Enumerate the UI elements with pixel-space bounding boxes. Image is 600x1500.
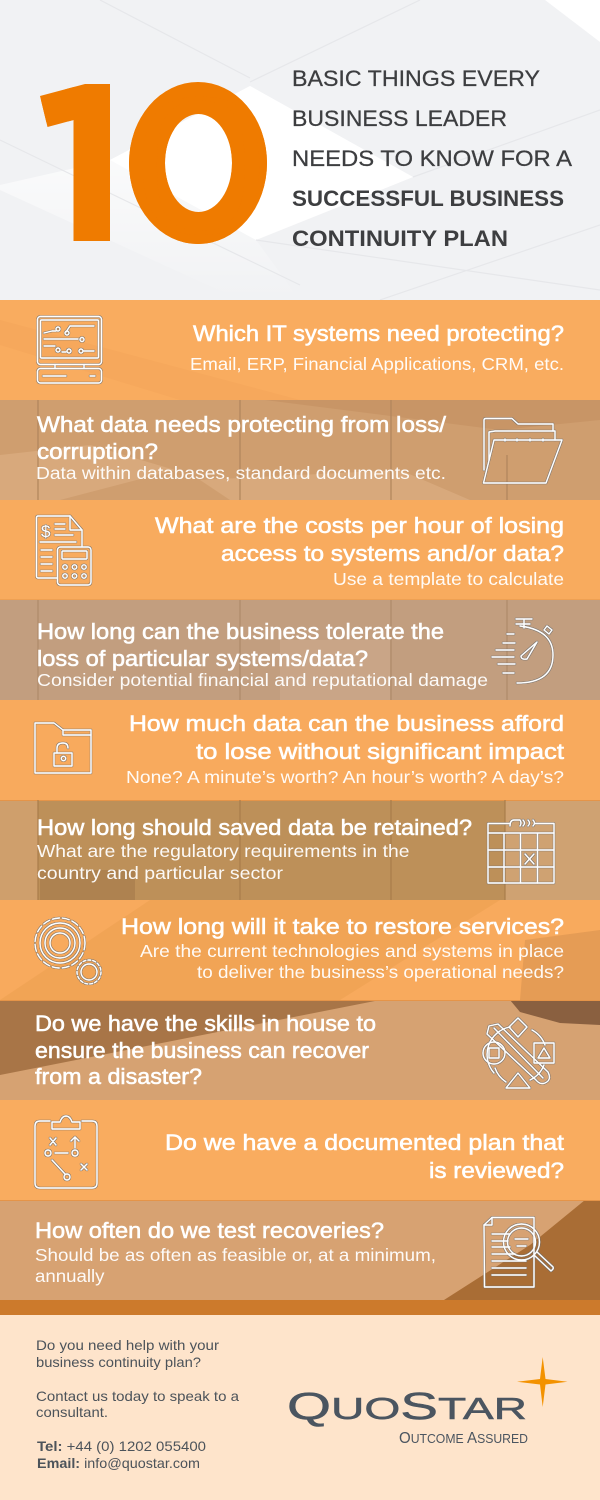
divider band: [0, 1300, 600, 1315]
text: [37, 841, 410, 883]
text: to deliver the business’s operational needs?: [197, 962, 564, 982]
panel: question 7: [0, 900, 600, 1000]
icon: folders: [484, 418, 562, 483]
heading: [37, 619, 444, 671]
text: annually: [35, 1266, 105, 1286]
heading: Do we have a documented plan that: [165, 1130, 564, 1155]
heading: How long can the business tolerate the: [37, 619, 444, 644]
heading: [37, 412, 447, 464]
panel: question 8: [0, 1000, 600, 1100]
heading: [155, 513, 564, 566]
heading: How long should saved data be retained?: [37, 815, 472, 840]
contact text: Email: info@quostar.com: [37, 1455, 200, 1471]
panel: question 9: [0, 1100, 600, 1200]
heading: What are the costs per hour of losing: [155, 513, 564, 538]
text: Consider potential financial and reputational damage: [37, 670, 488, 690]
text: country and particular sector: [37, 863, 283, 883]
heading: Do we have the skills in house to: [35, 1011, 376, 1036]
panel: question 10: [0, 1200, 600, 1300]
contact text: consultant.: [36, 1404, 108, 1420]
title: CONTINUITY PLAN: [292, 226, 508, 251]
heading: to lose without significant impact: [196, 739, 564, 764]
heading: access to systems and/or data?: [221, 541, 564, 566]
heading: corruption?: [37, 439, 158, 464]
panel: question 5: [0, 700, 600, 800]
text: Should be as often as feasible or, at a minimum,: [35, 1245, 436, 1265]
contact text: business continuity plan?: [36, 1354, 201, 1370]
panel: footer: [0, 1315, 600, 1500]
heading: How much data can the business afford: [129, 711, 564, 736]
logo wordmark: Q UO S TAR: [287, 1386, 527, 1428]
text: Email, ERP, Financial Applications, CRM, etc.: [190, 354, 564, 374]
title: BUSINESS LEADER: [292, 106, 507, 131]
text: Data within databases, standard documents etc.: [36, 463, 446, 483]
panel: question 2: [0, 400, 600, 500]
icon: invoice and calculator: $: [41, 522, 51, 541]
heading: What data needs protecting from loss/: [37, 412, 447, 437]
icon: document with magnifier: [484, 1218, 553, 1287]
icon: calendar: [488, 820, 554, 883]
heading: loss of particular systems/data?: [37, 646, 368, 671]
contact text: Do you need help with your: [36, 1337, 219, 1353]
heading: Which IT systems need protecting?: [193, 321, 564, 346]
panel: question 3: [0, 500, 600, 600]
contact text: Contact us today to speak to a: [36, 1388, 239, 1404]
text: [35, 1245, 436, 1286]
big number 10: 0: [117, 41, 285, 291]
heading: is reviewed?: [429, 1158, 564, 1183]
logo star: [517, 1357, 568, 1407]
icon: clipboard plan: [35, 1116, 97, 1188]
contact text: Tel: +44 (0) 1202 055400: [37, 1438, 206, 1454]
contact text: [36, 1337, 239, 1471]
heading: How long will it take to restore services?: [121, 914, 564, 939]
title: BASIC THINGS EVERY: [292, 66, 540, 91]
logo tagline: OUTCOME ASSURED: [399, 1430, 528, 1447]
heading: How often do we test recoveries?: [35, 1218, 384, 1243]
panel: question 6: [0, 800, 600, 900]
header background: [0, 0, 600, 300]
icon: folder with padlock: [35, 723, 91, 773]
heading: [129, 711, 564, 764]
icon: design tools: [483, 1018, 554, 1088]
text: Use a template to calculate: [333, 569, 564, 589]
heading: ensure the business can recover: [35, 1038, 369, 1063]
text: None? A minute’s worth? An hour’s worth? A day’s?: [126, 767, 564, 787]
text: What are the regulatory requirements in the: [37, 841, 410, 861]
panel: question 1: [0, 300, 600, 400]
heading: [165, 1130, 564, 1183]
title: NEEDS TO KNOW FOR A: [292, 146, 572, 171]
icon: stopwatch: [492, 619, 553, 683]
big number 10: [40, 82, 267, 244]
title: SUCCESSFUL BUSINESS: [292, 186, 564, 211]
icon: computer circuit: [38, 316, 102, 383]
panel: question 4: [0, 600, 600, 700]
icon: invoice and calculator: [36, 516, 91, 585]
heading: from a disaster?: [35, 1064, 202, 1089]
logo: QuoStar: [287, 1357, 568, 1447]
icon: gears: [35, 918, 101, 984]
text: Are the current technologies and systems in place: [140, 941, 564, 961]
text: [140, 941, 564, 982]
title: [292, 66, 572, 251]
heading: [35, 1011, 376, 1089]
